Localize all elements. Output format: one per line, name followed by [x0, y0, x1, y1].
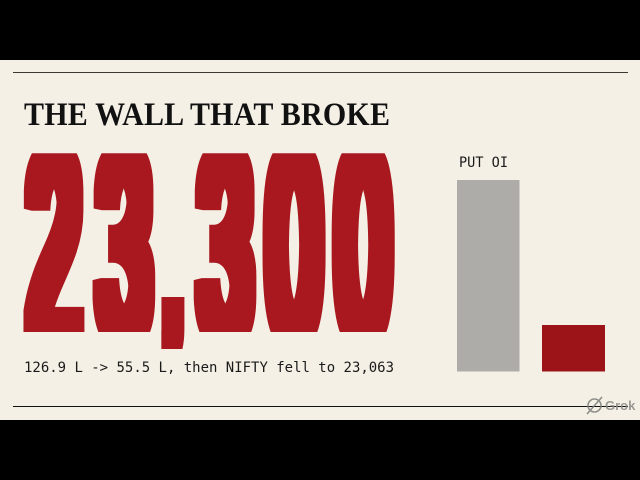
subtitle: 126.9 L -> 55.5 L, then NIFTY fell to 23,063	[24, 360, 394, 376]
big number: ,	[166, 191, 180, 353]
icon: Grok logo	[587, 397, 602, 414]
bar: after	[542, 325, 605, 372]
chart: put OI bars	[457, 155, 605, 372]
panel: paper background	[0, 60, 640, 420]
big number	[23, 153, 395, 349]
chart label: PUT OI	[459, 155, 508, 171]
infographic	[0, 60, 640, 420]
watermark: Grok	[587, 397, 636, 414]
title: THE WALL THAT BROKE	[24, 96, 390, 132]
big number: 23	[28, 99, 150, 391]
bar: before	[457, 180, 520, 372]
big number: 300	[199, 99, 389, 391]
watermark text: Grok	[605, 398, 636, 413]
